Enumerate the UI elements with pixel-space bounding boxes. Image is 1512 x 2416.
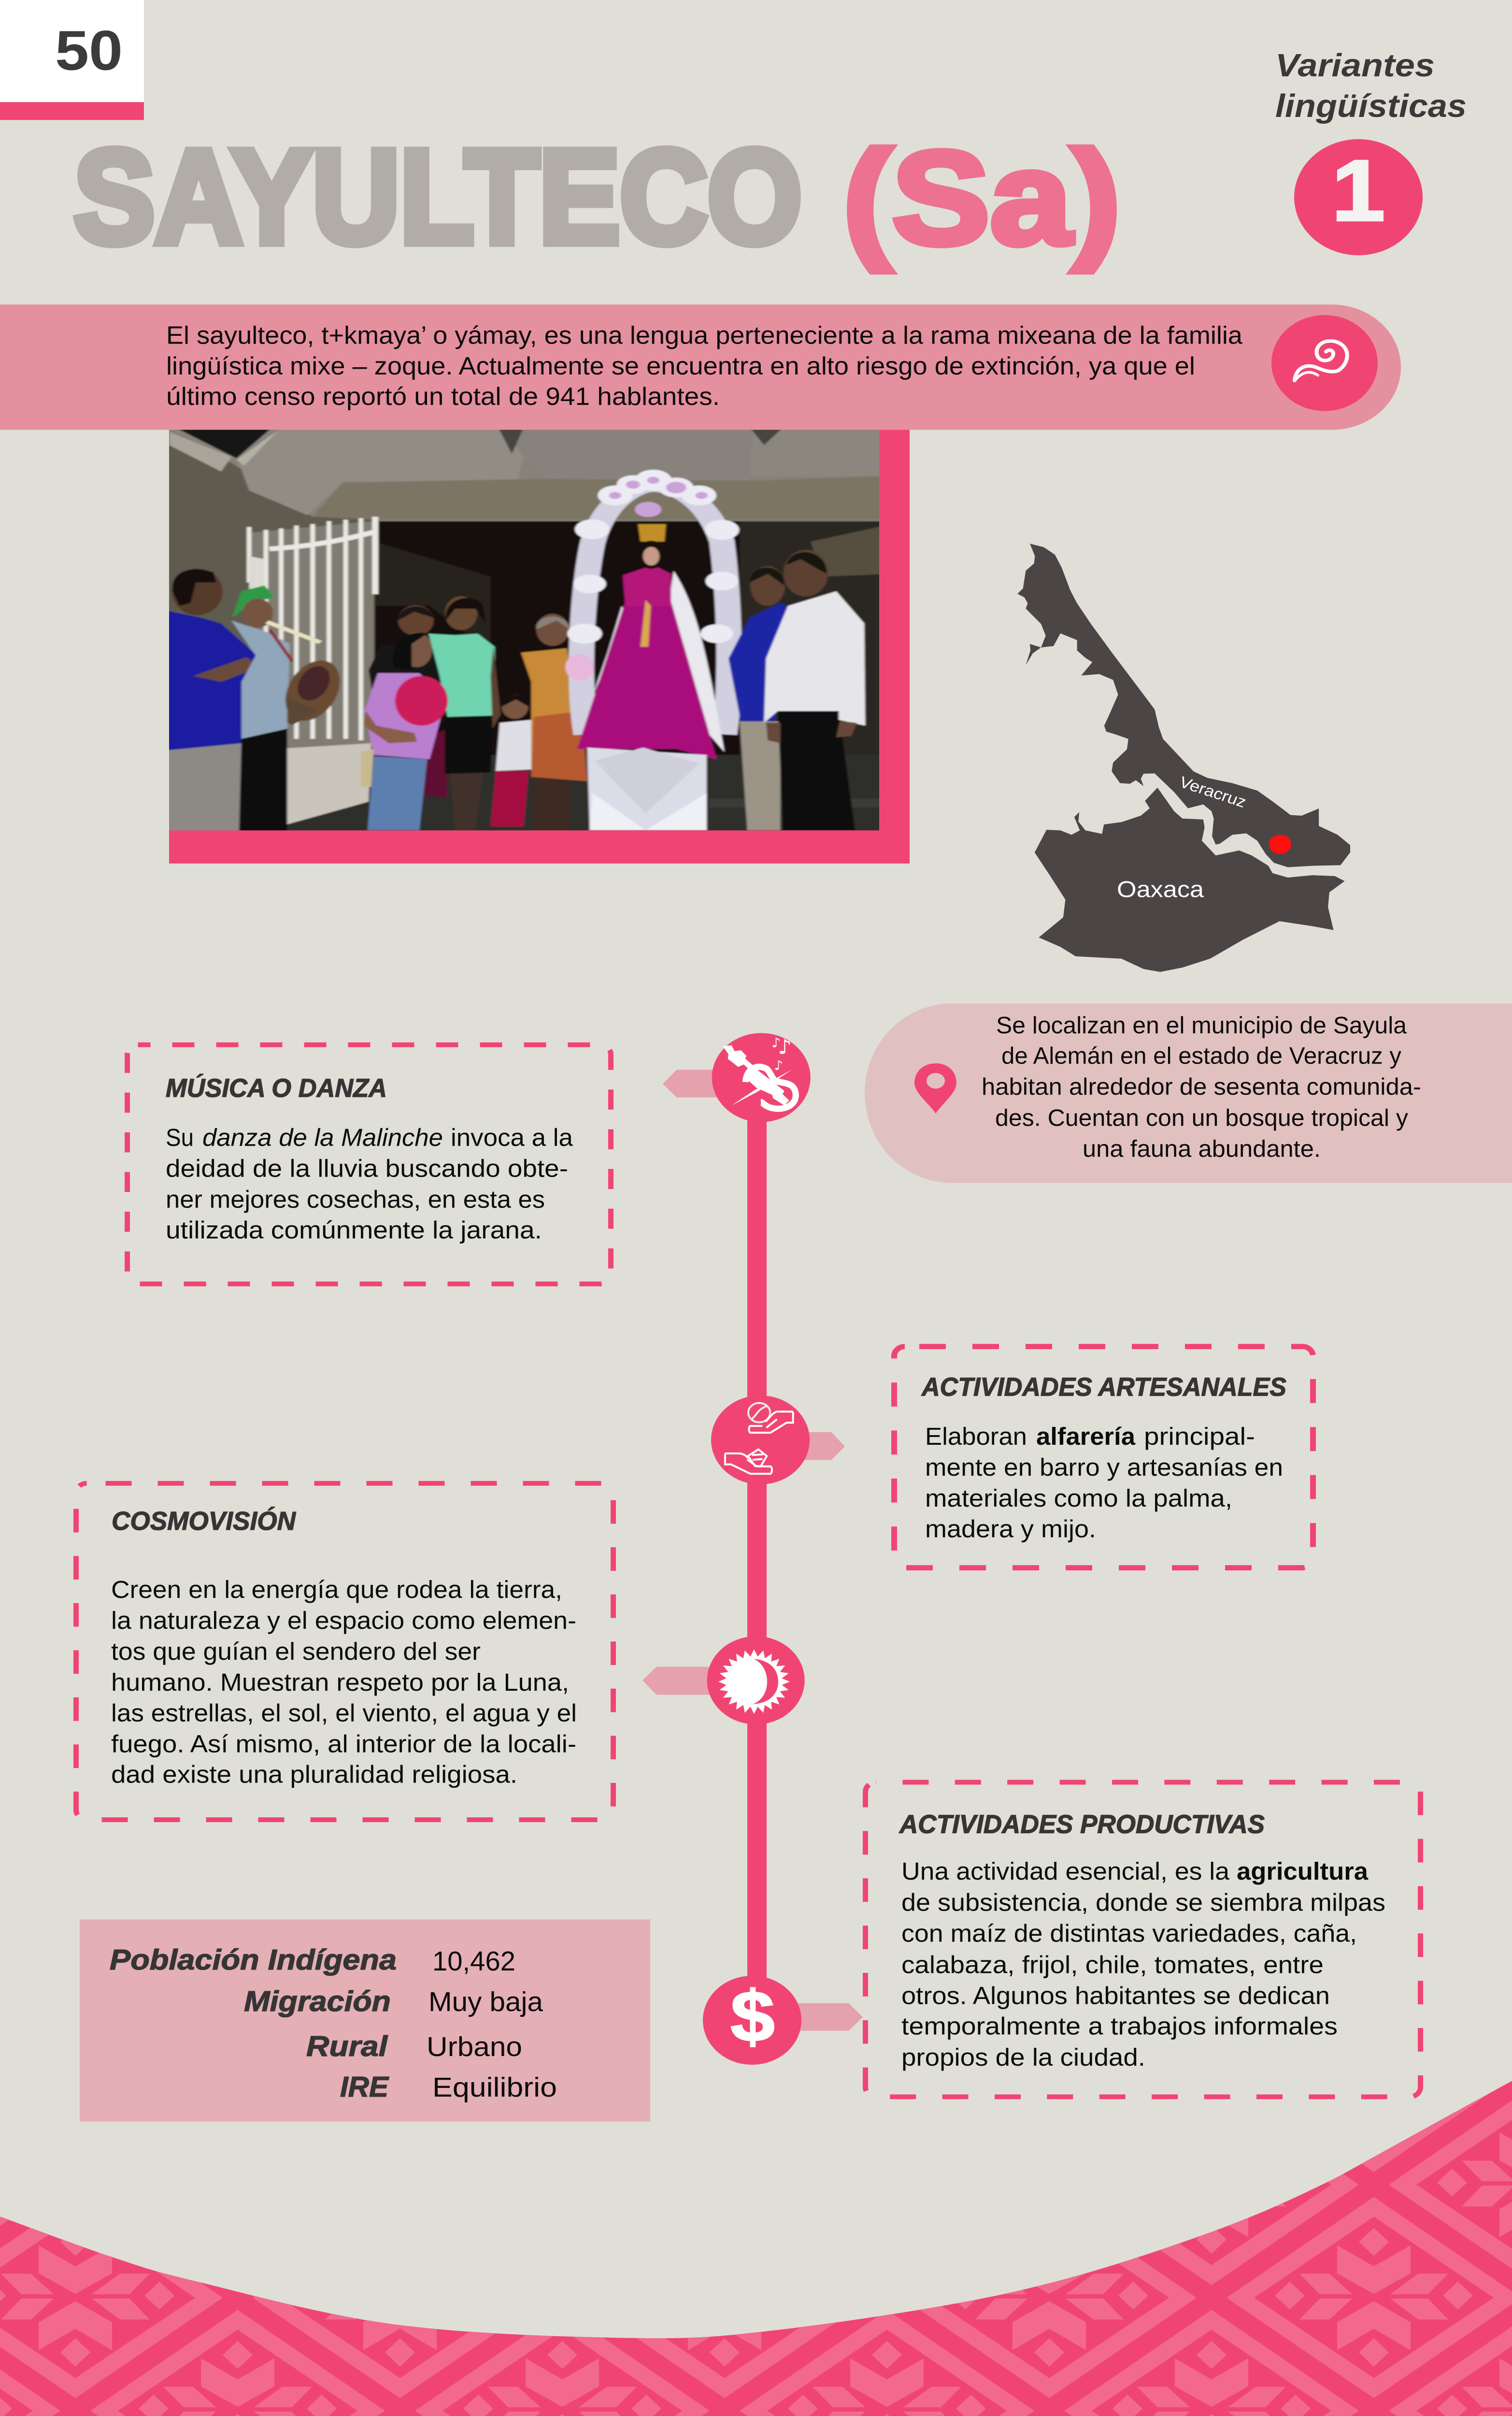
cosmovisión text: Creen en la energía que rodea la tierra, xyxy=(111,1576,562,1603)
dark doorway xyxy=(374,522,739,755)
left wall shading xyxy=(169,432,377,749)
intro band: último censo reportó un total de 941 hablantes. xyxy=(166,382,720,410)
panel: statistics: Muy baja xyxy=(428,1986,543,2017)
variantes lingüísticas badge: lingüísticas xyxy=(1275,87,1467,124)
productivas text: agricultura xyxy=(1237,1858,1368,1885)
panel: statistics: Rural xyxy=(306,2030,388,2062)
cosmovisión text: tos que guían el sendero del ser xyxy=(111,1639,481,1665)
musician with green cap xyxy=(239,729,287,834)
timeline xyxy=(642,1033,863,2065)
música text xyxy=(166,1124,573,1244)
title: (Sa) xyxy=(843,124,1121,273)
icon: violin: ♪ xyxy=(774,1058,783,1073)
panel: cosmovisión xyxy=(76,1483,613,1820)
map label: Veracruz xyxy=(1177,774,1249,811)
icon: violin: ♪ xyxy=(778,1035,792,1059)
panel: actividades productivas: ACTIVIDADES PRODUCTIVAS xyxy=(899,1810,1265,1839)
artesanales text: madera y mijo. xyxy=(925,1516,1096,1543)
gate xyxy=(249,521,374,749)
artesanales text: principal- xyxy=(1144,1423,1255,1450)
panel: actividades artesanales: ACTIVIDADES ARTESANALES xyxy=(921,1372,1286,1402)
icon: sun and moon xyxy=(707,1636,805,1725)
child xyxy=(491,771,528,826)
icon: money: $ xyxy=(730,1977,775,2057)
productivas text: otros. Algunos habitantes se dedican xyxy=(901,1983,1330,2010)
productivas text xyxy=(901,1858,1385,2071)
girl with flowers xyxy=(368,756,427,830)
artesanales text xyxy=(925,1423,1283,1543)
icon: location pin xyxy=(914,1064,956,1113)
cosmovisión text: las estrellas, el sol, el viento, el agua y el xyxy=(111,1700,577,1727)
location text: Se localizan en el municipio de Sayula xyxy=(996,1012,1407,1038)
location pill xyxy=(865,1004,1512,1183)
panel: statistics: Migración xyxy=(244,1985,391,2017)
intro band xyxy=(0,304,1401,430)
elder woman in orange dress xyxy=(534,777,570,830)
location marker xyxy=(1269,834,1291,854)
intro band: El sayulteco, t+kmaya’ o yámay, es una lengua perteneciente a la rama mixeana de la familia xyxy=(166,321,1242,349)
cosmovisión text: fuego. Así mismo, al interior de la locali- xyxy=(111,1731,576,1758)
música text: deidad de la lluvia buscando obte- xyxy=(166,1155,568,1182)
arrow: to cosmovisión xyxy=(642,1667,720,1695)
panel: statistics: IRE xyxy=(340,2071,389,2103)
location text: des. Cuentan con un bosque tropical y xyxy=(995,1104,1408,1131)
variantes lingüísticas badge xyxy=(1275,47,1467,255)
panel: música o danza xyxy=(128,1045,611,1284)
cosmovisión text xyxy=(111,1576,577,1788)
title: SAYULTECO xyxy=(74,122,802,271)
woman behind the girl xyxy=(422,729,447,797)
photo: community with the statue of the Virgin xyxy=(160,425,893,837)
intro band: lingüística mixe – zoque. Actualmente se encuentra en alto riesgo de extinción, ya que el xyxy=(166,351,1195,380)
floral arch xyxy=(582,485,729,734)
panel: cosmovisión: COSMOVISIÓN xyxy=(112,1507,297,1536)
panel: statistics: Equilibrio xyxy=(432,2072,557,2102)
man in blue shirt xyxy=(165,743,242,834)
map label: Oaxaca xyxy=(1117,877,1204,902)
map of Veracruz and Oaxaca xyxy=(1017,544,1350,972)
artesanales text: materiales como la palma, xyxy=(925,1485,1232,1512)
variantes lingüísticas badge: Variantes xyxy=(1275,47,1435,83)
música text: Su xyxy=(166,1124,194,1151)
productivas text: de subsistencia, donde se siembra milpas xyxy=(901,1889,1385,1916)
artesanales text: mente en barro y artesanías en xyxy=(925,1454,1283,1481)
icon: hands with crafts xyxy=(711,1395,810,1484)
productivas text: calabaza, frijol, chile, tomates, entre xyxy=(901,1952,1324,1979)
icon: violin: ♪ xyxy=(771,1035,781,1050)
cosmovisión text: la naturaleza y el espacio como elemen- xyxy=(111,1607,576,1634)
productivas text: con maíz de distintas variedades, caña, xyxy=(901,1920,1357,1947)
productivas text: temporalmente a trabajos informales xyxy=(901,2013,1338,2040)
icon: language scroll xyxy=(1271,315,1378,411)
música text: invoca a la xyxy=(451,1124,573,1151)
panel: música o danza: MÚSICA O DANZA xyxy=(166,1074,387,1103)
música text: ner mejores cosechas, en esta es xyxy=(166,1186,545,1213)
arrow: to productivas xyxy=(787,2003,863,2031)
panel: statistics: 10,462 xyxy=(432,1946,515,1976)
panel: actividades productivas xyxy=(866,1782,1420,2097)
man in white shirt xyxy=(778,710,855,830)
statue xyxy=(669,571,725,752)
arrow: to artesanales xyxy=(797,1432,845,1460)
cosmovisión text: dad existe una pluralidad religiosa. xyxy=(111,1761,517,1788)
artesanales text: Elaboran xyxy=(925,1423,1027,1450)
música text: utilizada comúnmente la jarana. xyxy=(166,1217,542,1244)
arrow: to música xyxy=(663,1070,725,1097)
photo frame xyxy=(169,430,910,863)
variantes lingüísticas badge: 1 xyxy=(1332,142,1385,239)
textile pattern footer xyxy=(0,2051,1512,2416)
pedestal xyxy=(587,748,707,830)
page number tab: 50 xyxy=(55,19,123,82)
location text: habitan alrededor de sesenta comunida- xyxy=(982,1073,1421,1100)
panel: statistics: Población Indígena xyxy=(110,1944,397,1976)
icon: money xyxy=(703,1976,801,2065)
man in blue polo xyxy=(740,721,780,830)
artesanales text: alfarería xyxy=(1036,1423,1135,1450)
ceiling base xyxy=(160,425,892,521)
location text: de Alemán en el estado de Veracruz y xyxy=(1001,1042,1401,1069)
productivas text: propios de la ciudad. xyxy=(901,2044,1145,2071)
panel: statistics: Urbano xyxy=(427,2031,522,2062)
woman in green blouse xyxy=(450,773,483,830)
panel: actividades artesanales xyxy=(894,1347,1313,1568)
música text: danza de la Malinche xyxy=(202,1124,443,1151)
panel: statistics xyxy=(80,1919,650,2121)
cosmovisión text: humano. Muestran respeto por la Luna, xyxy=(111,1669,569,1697)
location text xyxy=(982,1012,1421,1162)
location text: una fauna abundante. xyxy=(1083,1135,1321,1162)
productivas text: Una actividad esencial, es la xyxy=(901,1858,1229,1885)
icon: violin xyxy=(712,1033,811,1122)
floor xyxy=(272,755,892,834)
page number tab xyxy=(0,0,144,120)
